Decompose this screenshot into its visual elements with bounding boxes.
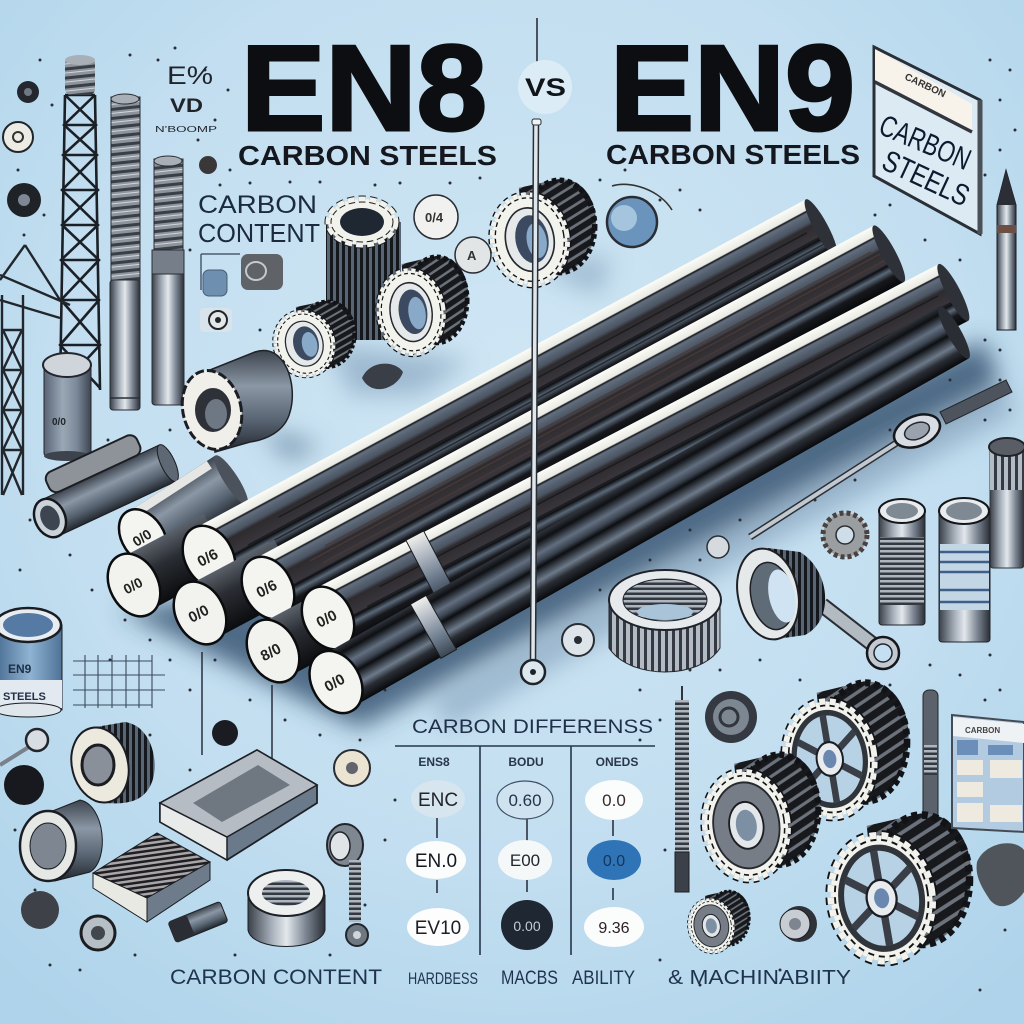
rod B: 0/6 <box>195 546 221 571</box>
oval EN row 2: EN.0 <box>415 851 457 872</box>
small washer bottom <box>780 906 817 942</box>
oval col 2 row 1: 0.60 <box>508 791 542 810</box>
oval col 2 row 1 <box>497 781 553 819</box>
sign: carbon steels: CARBON <box>903 72 947 100</box>
column headers <box>418 755 638 769</box>
small rod right <box>940 380 1012 424</box>
rod C: 0/0 <box>121 574 145 597</box>
oval col 2 row 2: E00 <box>510 851 540 870</box>
rod C <box>97 511 233 625</box>
small rings top left <box>3 81 217 217</box>
bottom labels: CARBON CONTENT <box>170 966 382 989</box>
blue can left <box>0 608 62 717</box>
icon: pen right <box>997 170 1016 330</box>
rod shadow <box>120 255 1010 728</box>
balls and washers <box>21 720 370 950</box>
thin stems <box>202 652 272 770</box>
gear front right <box>373 256 468 359</box>
hook <box>0 745 32 765</box>
ring with wrench <box>729 543 899 669</box>
steel plate <box>160 750 317 860</box>
rod F: 8/0 <box>258 640 284 665</box>
threaded rod <box>675 686 689 892</box>
roller cylinder <box>174 351 292 456</box>
connectors <box>437 818 613 900</box>
hook ring <box>26 729 48 751</box>
small percent note: VD <box>170 96 203 117</box>
washers upper <box>414 184 672 273</box>
small can <box>43 353 91 461</box>
coupling 2 <box>939 498 990 642</box>
spring clip <box>327 824 368 946</box>
threaded bolt 2 <box>110 94 140 410</box>
oval blue <box>587 840 641 880</box>
sign: carbon steels: STEELS <box>877 144 974 213</box>
heading: EN9: EN9 <box>610 20 855 156</box>
rod A <box>109 451 253 574</box>
ribbed block <box>93 833 210 922</box>
center needle divider <box>521 119 545 684</box>
rod E <box>231 221 911 628</box>
gear upper <box>777 681 909 824</box>
small gear bottom <box>685 891 750 955</box>
carbon content label: CONTENT <box>198 218 320 248</box>
small bolt <box>168 901 228 943</box>
rod B <box>172 195 843 597</box>
bottom labels: HARDBESS <box>408 969 478 988</box>
oval EN row 3 <box>407 908 469 946</box>
thin line above VS <box>536 18 538 62</box>
small blob <box>362 364 403 389</box>
gear large <box>821 813 971 970</box>
carbon content label: CARBON <box>198 191 317 219</box>
bottom labels: & MACHINABIITY <box>668 967 851 989</box>
washers upper: 0/4 <box>425 210 444 225</box>
gear middle <box>697 753 820 886</box>
ball <box>4 765 44 805</box>
sign: carbon steels <box>874 47 980 234</box>
coupling 1 <box>879 499 925 625</box>
wrench pointer <box>750 408 945 537</box>
carbon content label <box>198 191 320 248</box>
table title: CARBON DIFFERENSS <box>412 717 653 738</box>
rod G: 0/0 <box>314 607 340 632</box>
gear front left <box>270 301 355 380</box>
oval blue: 0.0 <box>603 853 625 870</box>
mini panel: CARBON <box>965 726 1000 735</box>
lattice tower <box>60 55 100 390</box>
nut cylinder <box>248 870 325 946</box>
small can: 0/0 <box>52 417 66 428</box>
gear upper middle <box>485 179 596 291</box>
rod G <box>291 260 975 658</box>
table: carbon differences <box>395 717 655 955</box>
threaded cylinder right edge <box>989 438 1024 568</box>
column headers: BODU <box>508 755 544 769</box>
small percent note: N'BOOMP <box>155 125 217 134</box>
washers upper: A <box>467 248 477 263</box>
bottom labels <box>170 966 851 989</box>
dark ring <box>705 691 757 743</box>
VS badge <box>518 60 572 114</box>
roller left lower <box>64 721 155 809</box>
rod D <box>163 537 304 653</box>
oval col 3 row 1 <box>585 780 643 820</box>
ring left lower <box>20 800 102 881</box>
mini panel <box>952 715 1024 832</box>
column headers: ONEDS <box>596 755 638 769</box>
subheading: carbon steels left: CARBON STEELS <box>238 140 497 171</box>
rod F <box>236 575 377 691</box>
rod H <box>299 300 976 723</box>
rod E: 0/6 <box>254 577 280 602</box>
subheading: carbon steels right: CARBON STEELS <box>606 139 860 170</box>
tilted pipe <box>19 422 183 542</box>
rod right lower <box>923 690 938 825</box>
small gear right <box>823 513 867 557</box>
small percent note: E% <box>167 62 213 90</box>
heading: EN8: EN8 <box>241 20 487 156</box>
bottom labels: ABILITY <box>572 968 635 989</box>
oval col 3 row 1: 0.0 <box>602 791 626 810</box>
blue can left: EN9 <box>8 662 32 676</box>
oval EN row 3: EV10 <box>415 918 461 939</box>
VS badge: VS <box>525 74 566 102</box>
oval col 3 row 3 <box>584 907 644 947</box>
blob bottom right <box>977 843 1024 906</box>
sign: carbon steels: CARBON <box>874 109 976 177</box>
threaded bolt 3 <box>152 156 184 405</box>
crane <box>0 245 70 495</box>
oval dark <box>501 900 553 950</box>
table lines <box>395 746 655 955</box>
small washers lower mid <box>562 536 729 656</box>
small percent note <box>155 62 217 134</box>
oval col 2 row 2 <box>498 840 552 880</box>
grid chart <box>73 655 165 708</box>
oval EN row 1: ENC <box>418 790 458 811</box>
oval EN row 1 <box>411 780 465 818</box>
ring nut <box>609 570 721 672</box>
blue can left: STEELS <box>3 691 46 703</box>
steel rod bundle <box>97 195 976 723</box>
rod H: 0/0 <box>322 671 348 696</box>
oval EN row 2 <box>406 841 466 879</box>
cylinder gear tall <box>326 199 401 340</box>
column headers: ENS8 <box>418 755 450 769</box>
oval dark: 0.00 <box>513 918 541 934</box>
small indicators <box>200 254 283 332</box>
rod A: 0/0 <box>129 526 155 550</box>
bottom labels: MACBS <box>501 968 558 989</box>
rod D: 0/0 <box>186 602 212 627</box>
oval col 3 row 3: 9.36 <box>598 920 630 937</box>
